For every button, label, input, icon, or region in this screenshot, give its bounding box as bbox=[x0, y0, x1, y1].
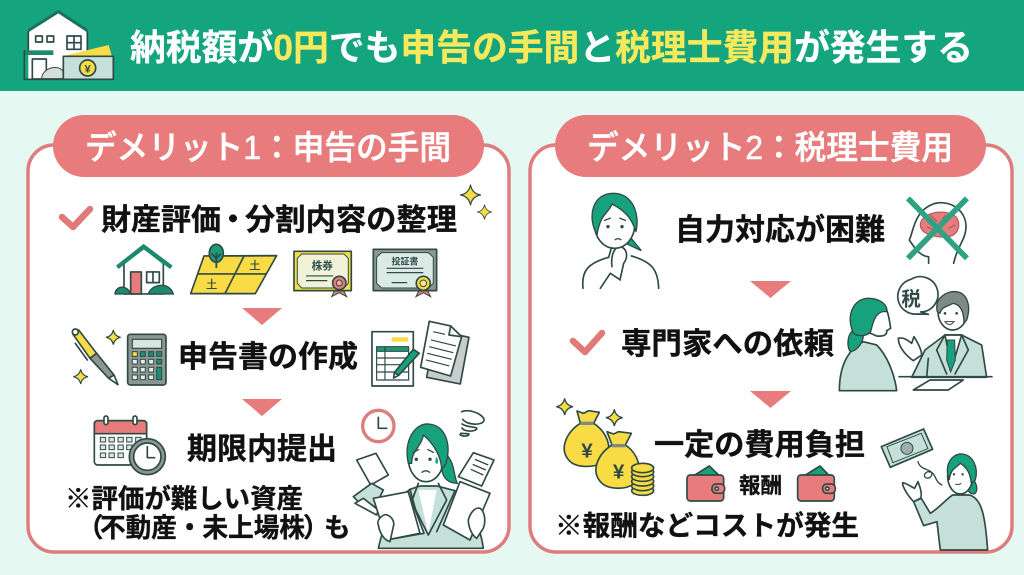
badge: demerit 1 heading bbox=[53, 115, 484, 177]
heading: create return: 申告書の作成 bbox=[178, 341, 358, 374]
arrow: step 2 to 3 bbox=[242, 399, 282, 416]
illustration: woman and banknote bbox=[881, 429, 988, 550]
icon: land plots bbox=[191, 244, 277, 294]
arrow: step 2 to 3 bbox=[750, 391, 791, 408]
note: hard to value assets: ※評価が難しい資産 bbox=[65, 484, 303, 514]
icon: calendar and clock bbox=[94, 416, 165, 475]
badge: demerit 2 heading: デメリット2：税理士費用 bbox=[587, 129, 953, 166]
badge: demerit 1 heading: デメリット1：申告の手間 bbox=[85, 129, 451, 166]
icon: investment certificate bbox=[373, 249, 437, 297]
icon: land plots: 土 bbox=[249, 259, 261, 273]
icon: stock certificate: 株券 bbox=[312, 259, 333, 272]
heading: asset valuation bbox=[101, 204, 457, 237]
icon: check mark bbox=[573, 333, 602, 352]
illustration: thinking woman bbox=[583, 193, 659, 288]
icon: money bags and coins: ¥ bbox=[581, 439, 593, 462]
heading: hard to self-handle: 自力対応が困難 bbox=[675, 213, 885, 247]
illustration: consultation with tax accountant: 税 bbox=[901, 289, 921, 311]
icon: calculator bbox=[128, 334, 166, 385]
heading: fixed cost burden: 一定の費用負担 bbox=[654, 429, 865, 462]
header band bbox=[0, 0, 1024, 91]
icon: money bags and coins bbox=[556, 398, 654, 495]
note: hard to value assets: も bbox=[324, 513, 350, 543]
illustration: consultation with tax accountant bbox=[839, 277, 993, 391]
icon: wallet left bbox=[687, 466, 725, 501]
icon: wallet right bbox=[798, 466, 835, 501]
icon: land plots: 土 bbox=[206, 277, 217, 291]
note: costs arise: ※報酬などコストが発生 bbox=[555, 510, 859, 541]
note: hard to value assets: 不動産・未上場株 bbox=[100, 513, 305, 543]
title: 納税額が0円でも申告の手間と税理士費用が発生する bbox=[130, 27, 973, 68]
heading: file by deadline: 期限内提出 bbox=[187, 433, 337, 466]
heading: request a professional: 専門家への依頼 bbox=[621, 328, 834, 361]
arrow: step 1 to 2 bbox=[242, 308, 282, 325]
heading: asset valuation: ・ bbox=[218, 204, 248, 237]
icon: house and money: ¥ bbox=[85, 63, 92, 75]
icon: sparkles bbox=[460, 185, 492, 219]
illustration: overwhelmed woman with documents bbox=[353, 410, 494, 548]
note: hard to value assets: ） bbox=[303, 513, 330, 543]
note: hard to value assets: （ bbox=[77, 513, 104, 543]
icon: check mark bbox=[62, 209, 90, 227]
icon: investment certificate: 投証書 bbox=[391, 255, 418, 266]
heading: asset valuation: 財産評価 bbox=[101, 204, 221, 237]
icon: pen with sparkles bbox=[72, 329, 121, 385]
icon: stock certificate bbox=[294, 251, 351, 297]
heading: asset valuation: 分割内容の整理 bbox=[245, 204, 457, 237]
icon: stacked papers bbox=[421, 321, 469, 384]
icon: house and money bbox=[24, 12, 113, 79]
label: fee: 報酬 bbox=[739, 474, 782, 498]
note: hard to value assets bbox=[65, 484, 350, 543]
panel: right demerit 2 bbox=[530, 115, 1012, 552]
arrow: step 1 to 2 bbox=[750, 281, 791, 298]
badge: demerit 2 heading bbox=[555, 115, 986, 177]
icon: form with pen bbox=[372, 332, 419, 386]
icon: house bbox=[115, 247, 173, 294]
icon: money bags and coins: ¥ bbox=[613, 460, 625, 483]
panel: left demerit 1 bbox=[28, 115, 509, 552]
icon: crossed-out brain bbox=[908, 198, 967, 263]
